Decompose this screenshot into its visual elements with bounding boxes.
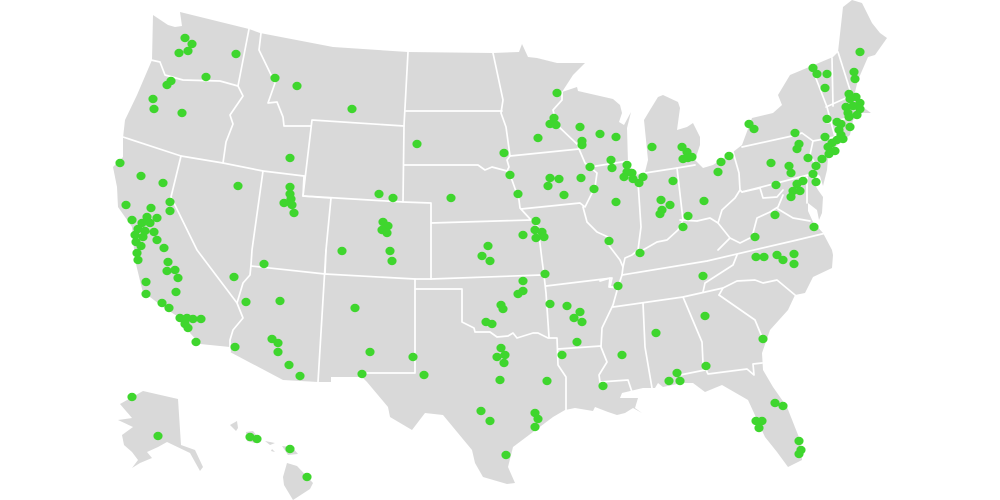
markers: Midwest — [446, 89, 697, 265]
markers: Southwest, Alaska and Hawaii — [127, 260, 429, 481]
markers: South Central — [476, 270, 623, 459]
location markers — [115, 34, 865, 481]
markers: Southeast — [598, 250, 806, 458]
state borders — [123, 29, 850, 410]
map: Hawaii — [230, 421, 313, 500]
map: contiguous states land — [113, 0, 887, 484]
markers: Northeast — [699, 48, 865, 241]
markers: Pacific Northwest and Mountain — [148, 34, 422, 265]
map: Alaska — [118, 391, 203, 471]
markers: California and Nevada — [115, 159, 239, 346]
